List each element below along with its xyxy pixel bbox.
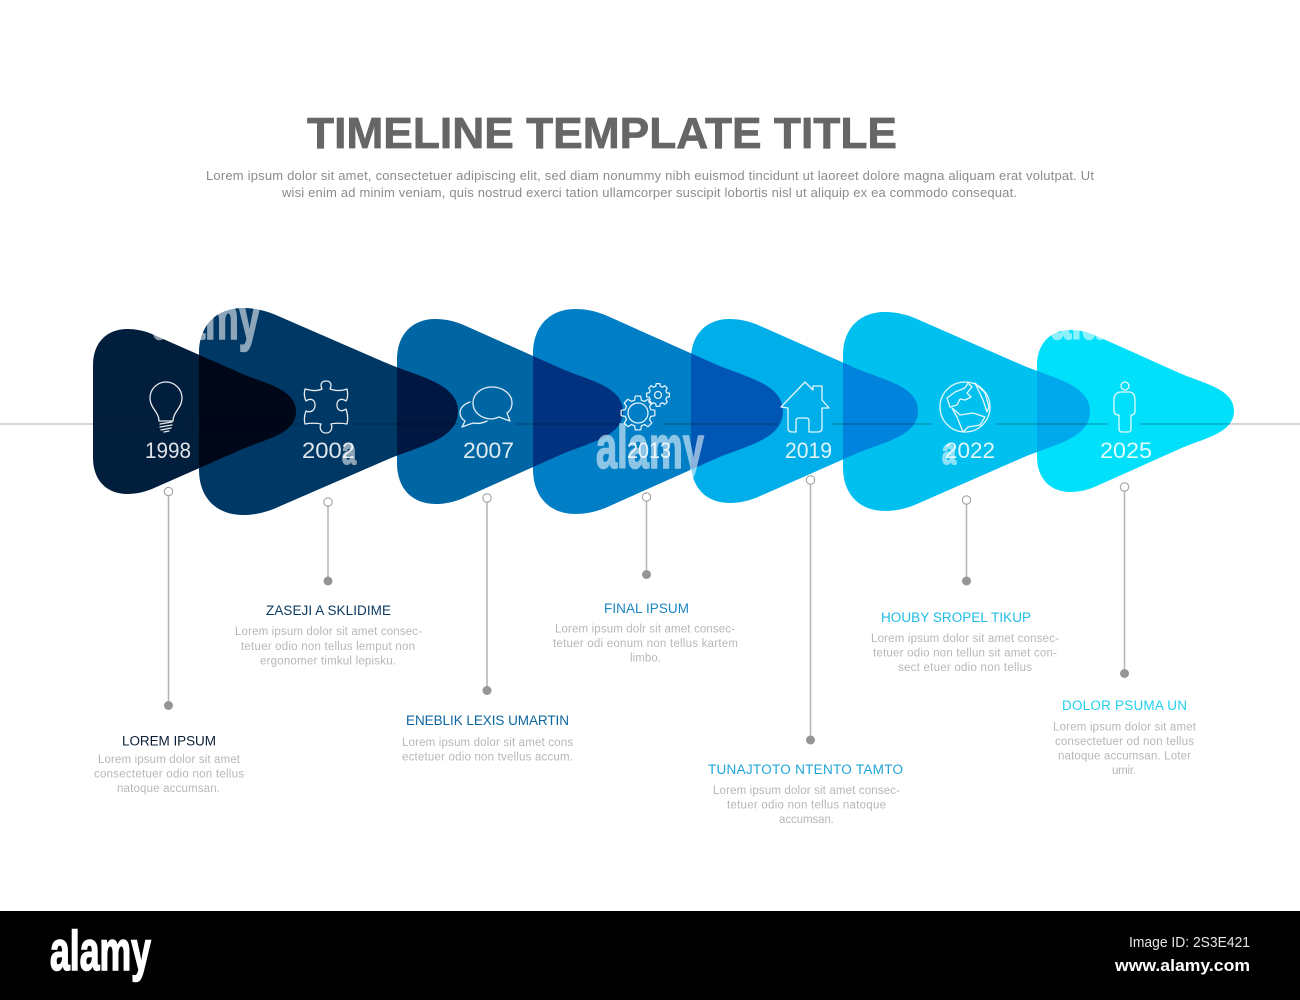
icon: light bulb [150, 382, 182, 432]
item: Dolor Psuma Un: Lorem ipsum dolor sit amet [1053, 722, 1197, 734]
watermark overlays: a [342, 431, 357, 472]
item: Dolor Psuma Un: natoque accumsan. Loter [1058, 750, 1191, 762]
item: Houby Sropel Tikup: HOUBY SROPEL TIKUP [881, 610, 1031, 625]
item: Tunajtoto Ntento Tamto: accumsan. [779, 814, 834, 826]
year 2002: 2002 [302, 438, 355, 463]
item: Tunajtoto Ntento Tamto: tetuer odio non tellus natoque [727, 800, 886, 812]
item: Tunajtoto Ntento Tamto [708, 476, 903, 826]
timeline axis line [0, 423, 1300, 425]
year 2013: 2013 [627, 438, 671, 463]
watermark overlays: a [942, 431, 957, 472]
year 1998: 1998 [145, 438, 191, 463]
watermark overlays: alamy [152, 285, 260, 352]
triangle 2007 [397, 319, 623, 504]
icon: gears [621, 384, 669, 430]
item: Zaseji a sklidime: ZASEJI A SKLIDIME [266, 603, 391, 618]
item: Eneblik Lexis Umartin: Lorem ipsum dolor sit amet cons [402, 737, 573, 749]
item: Eneblik Lexis Umartin: ENEBLIK LEXIS UMARTIN [406, 713, 569, 728]
triangle 2019 [691, 319, 918, 503]
triangle 2013 [533, 309, 783, 514]
footer bar: Image ID: 2S3E421 [1129, 934, 1250, 951]
item: Houby Sropel Tikup: tetuer odio non tellun sit amet con- [873, 648, 1057, 660]
footer bar [0, 911, 1300, 1000]
watermark overlays: alamy [1050, 285, 1158, 352]
item: Final Ipsum: Lorem ipsum dolr sit amet consec- [555, 624, 735, 636]
item: Lorem Ipsum: LOREM IPSUM [122, 734, 216, 748]
item: Dolor Psuma Un: consectetuer od non tellus [1055, 736, 1194, 748]
item: Lorem Ipsum [94, 487, 244, 795]
subtitle text: wisi enim ad minim veniam, quis nostrud exerci tation ullamcorper suscipit lobortis nisl ut aliquip ex ea commodo consequat. [281, 185, 1017, 200]
year 2022: 2022 [945, 438, 995, 463]
item: Dolor Psuma Un: umir. [1112, 765, 1136, 777]
item: Dolor Psuma Un: DOLOR PSUMA UN [1062, 698, 1187, 713]
item: Zaseji a sklidime: ergonomer timkul lepisku. [260, 656, 396, 668]
item: Final Ipsum: FINAL IPSUM [604, 601, 689, 616]
item: Eneblik Lexis Umartin: ectetuer odio non tvellus accum. [402, 752, 573, 764]
footer bar: www.alamy.com [1114, 956, 1250, 975]
subtitle text: Lorem ipsum dolor sit amet, consectetuer adipiscing elit, sed diam nonummy nibh euismod tincidunt ut laoreet dolore magna aliquam erat volutpat. Ut [206, 168, 1094, 183]
icon: house [781, 382, 829, 432]
item: Tunajtoto Ntento Tamto: TUNAJTOTO NTENTO TAMTO [708, 762, 903, 777]
item: Final Ipsum: limbo. [630, 652, 661, 664]
item: Eneblik Lexis Umartin [402, 494, 573, 764]
item: Final Ipsum: tetuer odi eonum non tellus kartem [553, 638, 738, 650]
item: Houby Sropel Tikup [871, 496, 1059, 674]
item: Houby Sropel Tikup: Lorem ipsum dolor sit amet consec- [871, 633, 1059, 645]
icon: puzzle piece [304, 381, 348, 433]
icon: speech bubbles [460, 387, 512, 427]
item: Zaseji a sklidime: tetuer odio non tellus lemput non [241, 641, 415, 653]
watermark overlays [152, 285, 1158, 481]
item: Lorem Ipsum: natoque accumsan. [117, 783, 220, 795]
item: Final Ipsum [553, 493, 738, 664]
icon: globe [940, 382, 990, 432]
item: Tunajtoto Ntento Tamto: Lorem ipsum dolor sit amet consec- [713, 785, 900, 797]
triangle 2022 [843, 312, 1090, 511]
triangle 2002 [199, 308, 458, 515]
item: Houby Sropel Tikup: sect etuer odio non tellus [898, 662, 1032, 674]
footer bar: alamy [50, 919, 151, 982]
item: Lorem Ipsum: consectetuer odio non tellus [94, 768, 244, 780]
title: TIMELINE TEMPLATE TITLE [307, 109, 897, 158]
triangle 2025 [1037, 330, 1234, 492]
watermark overlays: alamy [596, 414, 704, 481]
triangle 1998 [93, 329, 296, 494]
item: Dolor Psuma Un [1053, 483, 1197, 777]
subtitle text [206, 168, 1094, 200]
year 2019: 2019 [785, 438, 832, 463]
item: Zaseji a sklidime: Lorem ipsum dolor sit amet consec- [235, 626, 422, 638]
icon: person [1114, 382, 1135, 432]
year 2025: 2025 [1100, 438, 1152, 463]
item: Zaseji a sklidime [235, 498, 422, 668]
item: Lorem Ipsum: Lorem ipsum dolor sit amet [98, 754, 241, 766]
year 2007: 2007 [463, 438, 514, 463]
